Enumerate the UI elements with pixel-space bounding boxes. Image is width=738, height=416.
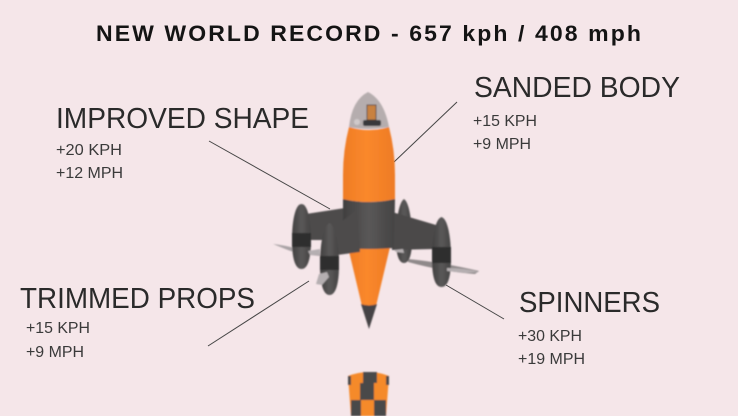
callout: improved shape: IMPROVED SHAPE	[56, 103, 309, 135]
callout: improved shape	[56, 103, 330, 209]
front left wing	[334, 210, 360, 255]
front left pod	[320, 223, 339, 295]
callout: spinners: +30 KPH	[518, 328, 582, 345]
callout: sanded body	[394, 72, 680, 162]
back propellers	[273, 244, 479, 274]
back left pod	[292, 204, 311, 269]
spinner prop stubs	[308, 249, 479, 285]
checkered launch tube	[348, 372, 389, 416]
back right pod	[396, 199, 412, 263]
dark tail tip	[361, 304, 377, 329]
right front pod	[432, 217, 451, 287]
canopy nose	[349, 92, 389, 129]
callout: sanded body: SANDED BODY	[474, 72, 680, 104]
callout: trimmed props: +15 KPH	[26, 320, 90, 337]
rocket aircraft	[273, 92, 479, 329]
callout: spinners	[446, 285, 660, 368]
upper orange body	[343, 127, 395, 202]
central dark fuselage	[343, 199, 395, 250]
callout: sanded body: +15 KPH	[473, 113, 537, 130]
callout: spinners: SPINNERS	[519, 287, 660, 319]
callout: trimmed props: +9 MPH	[26, 344, 84, 361]
callout: sanded body: +9 MPH	[473, 136, 531, 153]
title: NEW WORLD RECORD - 657 kph / 408 mph	[96, 21, 643, 46]
back left wing	[306, 208, 345, 240]
right wing	[392, 212, 436, 250]
callout: spinners: +19 MPH	[518, 351, 585, 368]
callout: improved shape: +12 MPH	[56, 165, 123, 182]
lower orange body	[348, 247, 390, 306]
callout: improved shape: +20 KPH	[56, 142, 122, 159]
callout: trimmed props	[20, 281, 309, 361]
callout: trimmed props: TRIMMED PROPS	[20, 283, 255, 315]
